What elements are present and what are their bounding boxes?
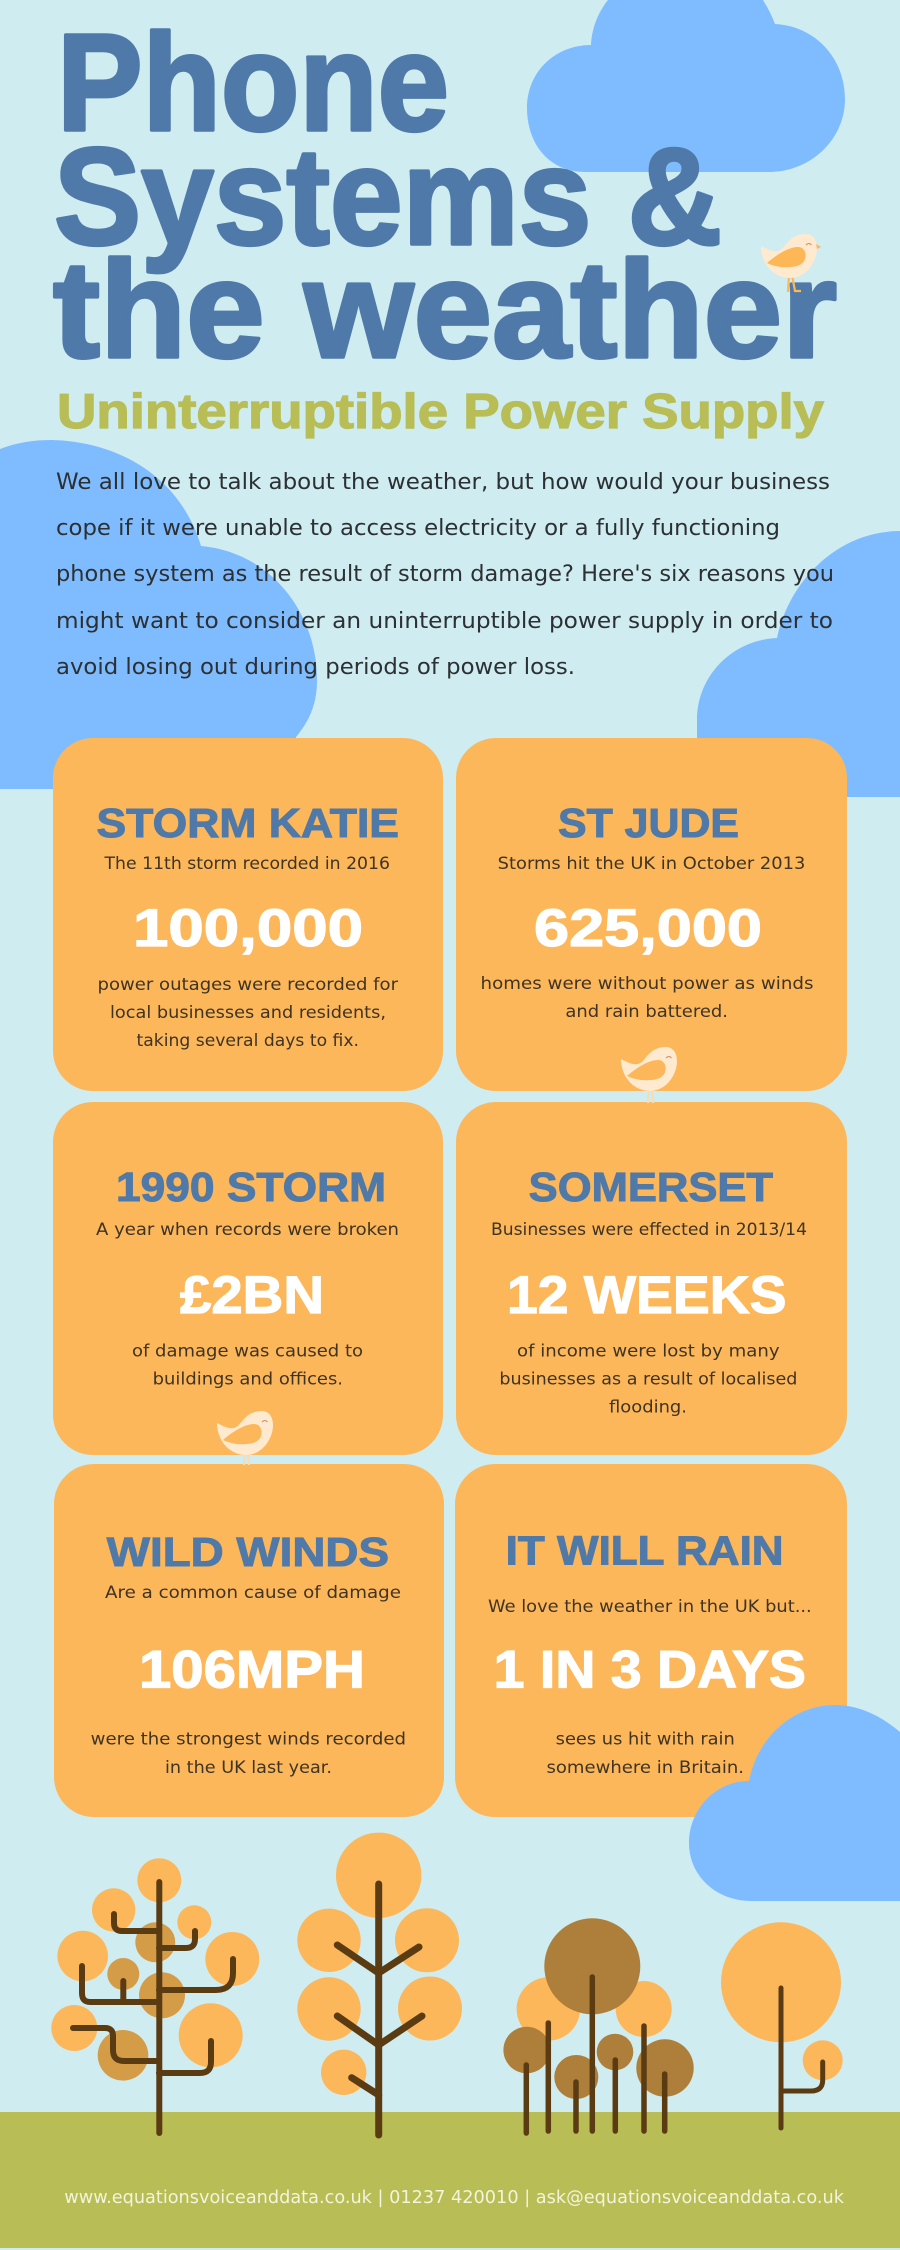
icon: bird on st jude panel: [621, 1047, 677, 1103]
panel: somerset: 12 WEEKS: [507, 1266, 786, 1325]
panel: 1990 storm: buildings and offices.: [153, 1370, 343, 1390]
panel: it will rain: [455, 1464, 847, 1817]
footer contact line: www.equationsvoiceanddata.co.uk | 01237 420010 | ask@equationsvoiceanddata.co.uk: [64, 2188, 845, 2208]
panel: somerset: flooding.: [609, 1398, 687, 1418]
panel: st jude: ST JUDE: [558, 800, 739, 846]
panel: wild winds: were the strongest winds recorded: [91, 1730, 406, 1750]
panel: somerset: businesses as a result of localised: [499, 1370, 797, 1390]
panel: somerset: Businesses were effected in 2013/14: [491, 1220, 807, 1240]
panel: st jude: homes were without power as winds: [480, 974, 814, 994]
panel: somerset: of income were lost by many: [517, 1342, 780, 1362]
panel: 1990 storm: £2BN: [180, 1266, 324, 1325]
panel: wild winds: 106MPH: [139, 1640, 365, 1699]
intro text: cope if it were unable to access electricity or a fully functioning: [56, 516, 780, 541]
panel: st jude: 625,000: [534, 899, 762, 958]
panel: it will rain: somewhere in Britain.: [546, 1758, 744, 1778]
tree 1: branching: [51, 1858, 259, 2133]
panel: 1990 storm: [53, 1102, 443, 1455]
panel: it will rain: sees us hit with rain: [556, 1730, 735, 1750]
panel: storm katie: STORM KATIE: [96, 800, 399, 846]
intro text: avoid losing out during periods of power loss.: [56, 655, 575, 680]
panel: storm katie: The 11th storm recorded in 2016: [103, 854, 390, 874]
panel: storm katie: power outages were recorded for: [98, 975, 398, 995]
cloud: bottom right: [689, 1705, 900, 1901]
tree 3: grove: [503, 1918, 694, 2133]
panel: 1990 storm: 1990 STORM: [116, 1164, 386, 1210]
ground: [0, 2112, 900, 2248]
panel: storm katie: local businesses and residents,: [110, 1003, 386, 1023]
cloud: left middle: [0, 440, 317, 789]
subtitle: Uninterruptible Power Supply: [57, 385, 824, 439]
panel: it will rain: 1 IN 3 DAYS: [494, 1640, 806, 1699]
panel: it will rain: We love the weather in the UK but...: [488, 1597, 812, 1617]
panel: storm katie: taking several days to fix.: [136, 1031, 359, 1051]
icon: bird on 1990 storm panel: [217, 1411, 273, 1465]
icon: bird on title: [761, 234, 821, 292]
title: [53, 6, 837, 387]
cloud: top right: [527, 0, 845, 172]
panel: somerset: SOMERSET: [529, 1164, 773, 1210]
panel: storm katie: [53, 738, 443, 1091]
panel: wild winds: in the UK last year.: [165, 1758, 332, 1778]
tree 4: large round: [721, 1922, 843, 2128]
panel: somerset: [456, 1102, 847, 1455]
panel: st jude: Storms hit the UK in October 2013: [498, 854, 805, 874]
panel: wild winds: [54, 1464, 444, 1817]
cloud: right middle: [697, 531, 900, 797]
intro text: [56, 470, 834, 680]
panel: st jude: [456, 738, 847, 1091]
title: Phone: [57, 6, 449, 160]
panel: storm katie: 100,000: [133, 899, 363, 958]
panel: it will rain: IT WILL RAIN: [506, 1528, 784, 1574]
intro text: might want to consider an uninterruptible power supply in order to: [56, 609, 833, 634]
panel: wild winds: Are a common cause of damage: [105, 1583, 401, 1603]
tree 2: forked: [297, 1833, 462, 2135]
panel: 1990 storm: A year when records were broken: [96, 1220, 399, 1240]
title: the weather: [53, 233, 837, 387]
intro text: We all love to talk about the weather, but how would your business: [56, 470, 830, 495]
intro text: phone system as the result of storm damage? Here's six reasons you: [56, 562, 834, 587]
panel: wild winds: WILD WINDS: [107, 1529, 389, 1575]
panel: st jude: and rain battered.: [565, 1002, 728, 1022]
panel: 1990 storm: of damage was caused to: [132, 1342, 363, 1362]
title: Systems &: [54, 120, 722, 274]
